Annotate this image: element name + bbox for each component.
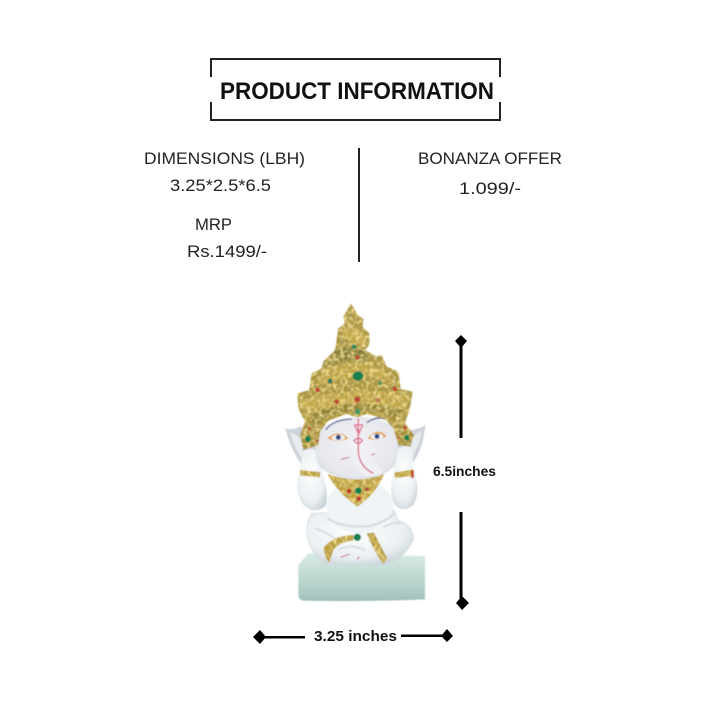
eye shadow (327, 433, 349, 441)
cheek marks (341, 453, 375, 459)
shadow folds (327, 513, 394, 526)
necklace jewels (355, 487, 362, 494)
crown highlights (302, 328, 408, 413)
title frame with heading (211, 59, 500, 120)
width label: 3.25 inches (314, 629, 397, 645)
offer label: BONANZA OFFER (418, 149, 562, 168)
left ear (285, 426, 320, 472)
statue body (307, 480, 413, 565)
eyes (332, 435, 345, 441)
armbands and jewellery gold (300, 470, 320, 477)
height arrow (455, 335, 469, 610)
right ear (393, 425, 426, 470)
statue base (298, 553, 425, 601)
left product details (144, 149, 305, 261)
right ear inner (412, 431, 422, 457)
eyebrows (326, 418, 387, 430)
left ear inner (290, 433, 303, 460)
right offer details (418, 149, 562, 198)
statue ornaments (300, 469, 414, 564)
trunk line (358, 418, 373, 473)
trunk (348, 450, 383, 476)
product photo: Ganesha statue (285, 303, 426, 601)
crown jewels (353, 371, 363, 381)
forehead mark (354, 425, 363, 443)
width arrow (253, 629, 453, 644)
offer value: 1.099/- (459, 179, 521, 198)
height label: 6.5inches (433, 464, 496, 479)
title: PRODUCT INFORMATION (220, 78, 494, 105)
waist jewel (354, 534, 361, 541)
statue ears, arms and head (285, 417, 426, 510)
legs (307, 510, 413, 565)
red marks on foot (341, 554, 359, 559)
MRP value: Rs.1499/- (187, 242, 267, 261)
head (316, 417, 398, 481)
armband red mark (411, 470, 414, 478)
dimensions label: DIMENSIONS (LBH) (144, 149, 305, 168)
dimensions value: 3.25*2.5*6.5 (170, 176, 271, 195)
statue crown (297, 303, 414, 450)
MRP label: MRP (195, 215, 232, 234)
torso (327, 480, 393, 533)
right arm (391, 446, 417, 509)
vertical divider (358, 148, 360, 262)
left arm (297, 449, 327, 510)
